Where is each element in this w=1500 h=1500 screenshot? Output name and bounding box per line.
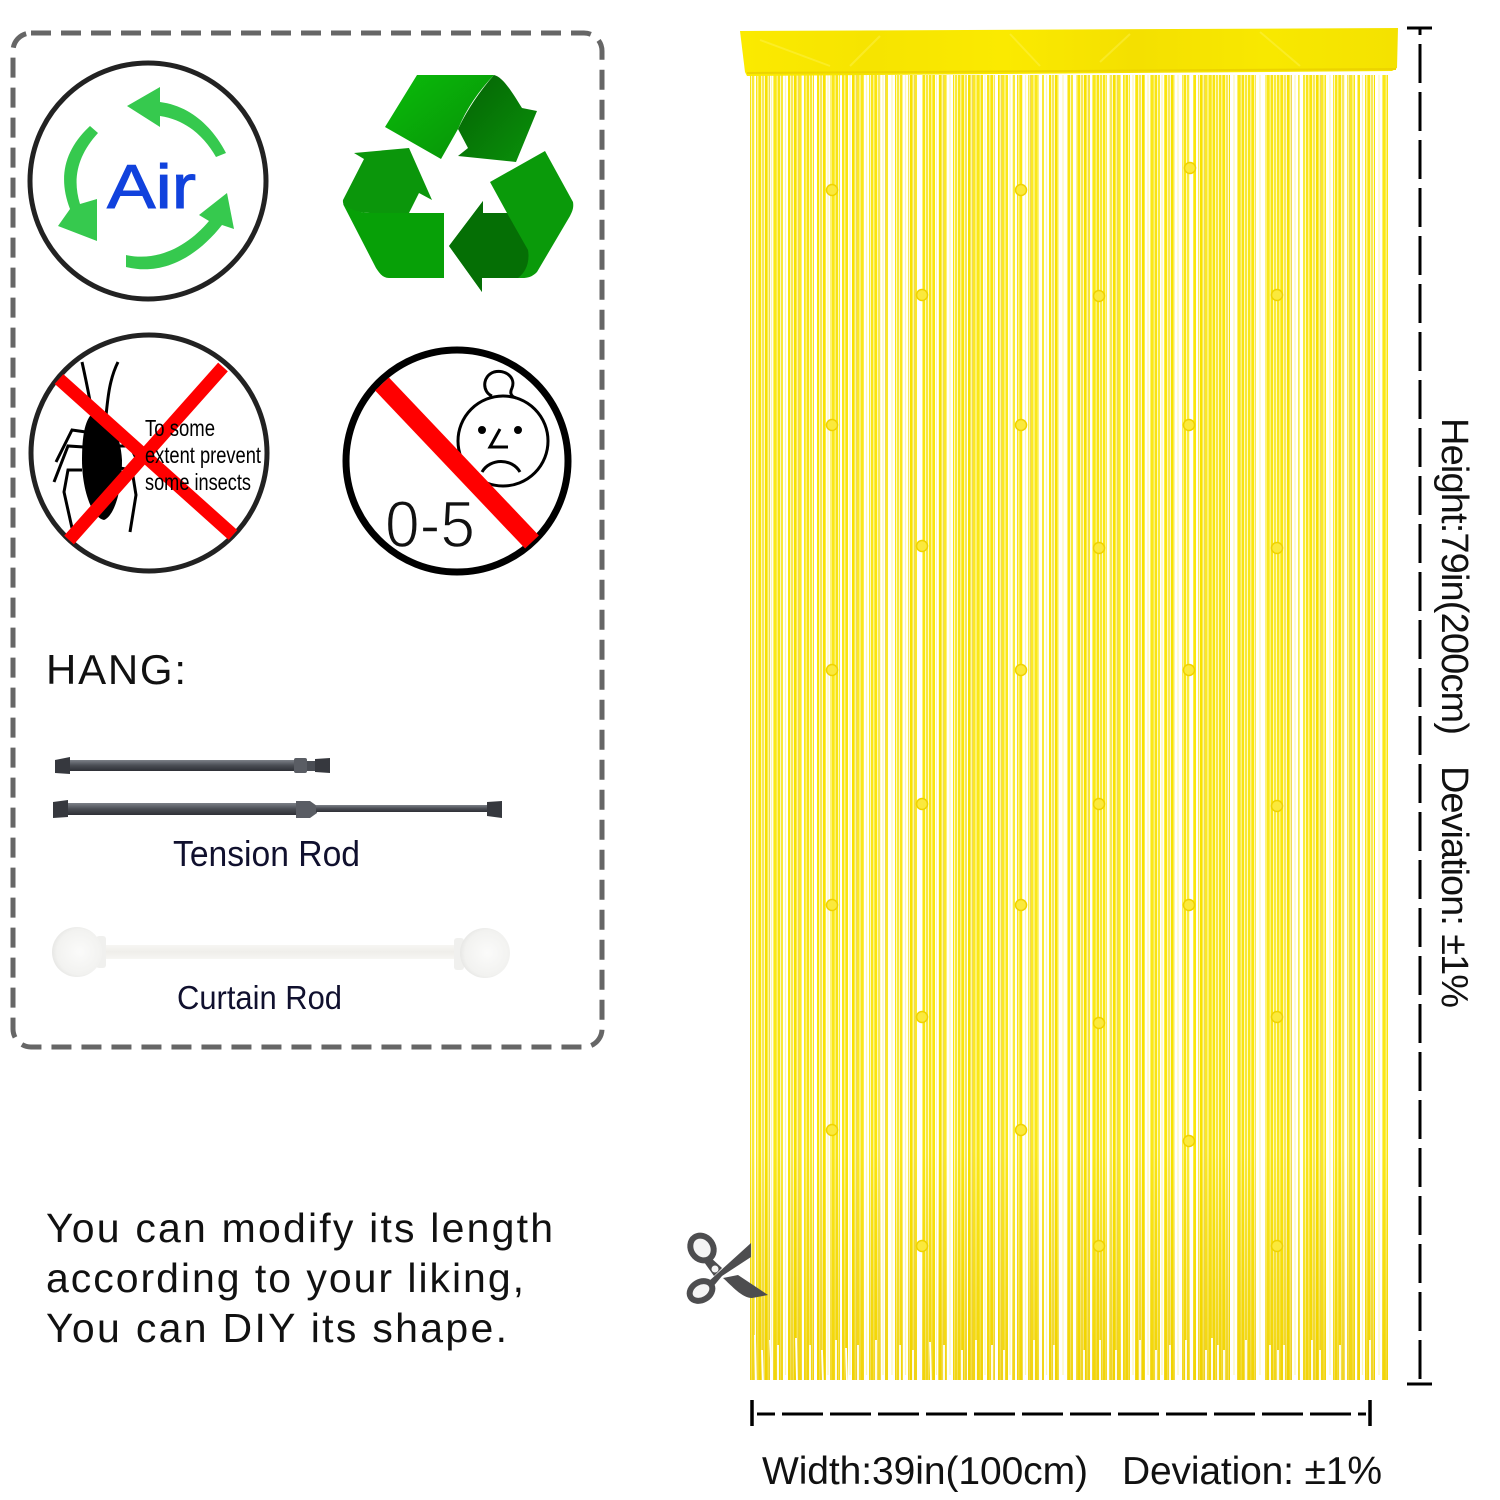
yellow string curtain <box>740 28 1398 1382</box>
height label: Deviation: ±1% <box>1433 766 1475 1008</box>
text block: DIY note: You can DIY its shape. <box>46 1305 507 1351</box>
icon: recycling symbol <box>343 75 573 292</box>
width dimension line <box>752 1400 1370 1426</box>
curtain rod <box>52 927 510 978</box>
icon: insect prevention: To some <box>145 415 215 441</box>
height label <box>1433 418 1475 1008</box>
icon: insect prevention: extent prevent <box>145 442 261 468</box>
baby face <box>458 371 548 486</box>
heading: HANG: HANG: <box>46 646 186 693</box>
icon: insect prevention: some insects <box>145 469 251 495</box>
dashed panel border <box>13 33 602 1047</box>
icon: not for ages 0-5: 0-5 <box>385 487 475 561</box>
icon: not for ages 0-5 <box>346 350 568 572</box>
label: curtain rod: Curtain Rod <box>177 979 342 1016</box>
text block: DIY note: according to your liking, <box>46 1255 524 1301</box>
text block: DIY note <box>46 1205 553 1351</box>
panel: features and hanging options <box>13 33 602 1047</box>
width label: Width:39in(100cm) <box>762 1450 1088 1493</box>
tension rod, extended <box>53 800 502 818</box>
text block: DIY note: You can modify its length <box>46 1205 553 1251</box>
width label: Deviation: ±1% <box>1122 1450 1382 1493</box>
curtain header hem <box>740 28 1398 76</box>
label: tension rod: Tension Rod <box>173 833 360 874</box>
icon: air circulation: Air <box>107 153 196 222</box>
icon: scissors <box>686 1231 768 1305</box>
icon: insect prevention <box>31 335 267 571</box>
icon: air circulation <box>30 63 266 299</box>
width label <box>762 1450 1382 1493</box>
curtain beads <box>826 162 1282 1252</box>
height label: Height:79in(200cm) <box>1433 418 1475 735</box>
curtain strands <box>750 75 1388 1382</box>
insect silhouette <box>54 362 136 532</box>
tension rod, short <box>55 757 330 774</box>
height dimension line <box>1407 28 1432 1384</box>
